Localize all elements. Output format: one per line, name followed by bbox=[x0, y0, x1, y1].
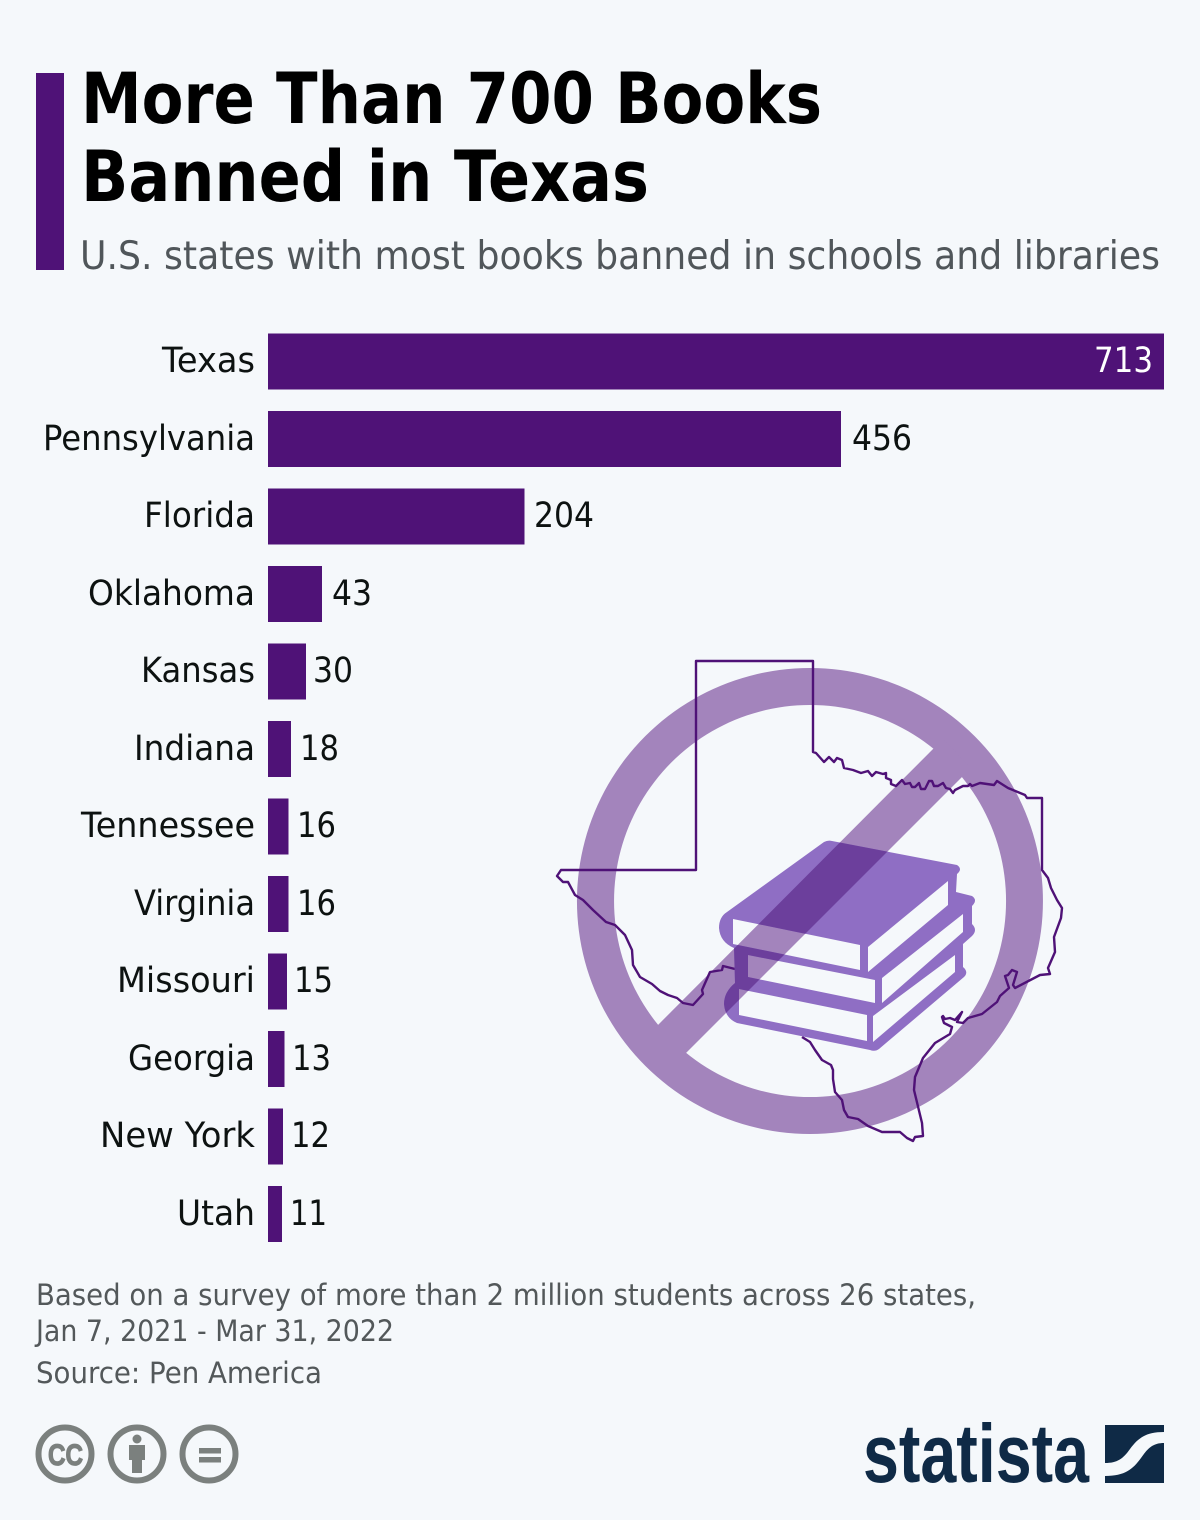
bar chart bbox=[43, 334, 1164, 1242]
row: Texas: Texas bbox=[161, 341, 255, 381]
icon: prohibition sign bbox=[577, 668, 1043, 1134]
row: Kansas: Kansas bbox=[141, 651, 255, 691]
row: Georgia: 13 bbox=[292, 1039, 331, 1079]
row: New York bbox=[100, 1108, 330, 1164]
row: Missouri: 15 bbox=[294, 961, 333, 1001]
row: New York: New York bbox=[100, 1116, 255, 1156]
icon: creative commons bbox=[38, 1428, 92, 1480]
row: Kansas bbox=[141, 644, 353, 700]
illustration: prohibition sign, Texas outline and books bbox=[557, 661, 1062, 1141]
title bbox=[81, 58, 822, 218]
title: Banned in Texas bbox=[81, 136, 649, 218]
row: Oklahoma: Oklahoma bbox=[88, 574, 255, 614]
row: Utah: 11 bbox=[290, 1194, 327, 1234]
row: Texas bbox=[161, 334, 1164, 390]
header accent bar bbox=[36, 73, 64, 270]
row: Florida: Florida bbox=[144, 496, 255, 536]
row: Georgia bbox=[128, 1031, 331, 1087]
row: Pennsylvania: 456 bbox=[852, 419, 912, 459]
row: Indiana: 18 bbox=[300, 729, 339, 769]
footnote and source: Based on a survey of more than 2 million students across 26 states, bbox=[36, 1278, 976, 1312]
Texas state outline bbox=[557, 661, 1062, 1141]
row: Missouri bbox=[117, 954, 333, 1010]
footnote and source bbox=[34, 1278, 976, 1390]
row: Oklahoma: 43 bbox=[332, 574, 372, 614]
icon: attribution bbox=[110, 1428, 164, 1480]
icon: creative commons: CC bbox=[48, 1439, 83, 1472]
row: Pennsylvania bbox=[43, 411, 912, 467]
footnote and source: Jan 7, 2021 - Mar 31, 2022 bbox=[34, 1314, 394, 1348]
row: Indiana bbox=[134, 721, 339, 777]
license icons bbox=[38, 1428, 236, 1480]
row: Utah: Utah bbox=[177, 1194, 255, 1234]
icon: no derivatives bbox=[182, 1428, 236, 1480]
row: Tennessee: 16 bbox=[297, 806, 336, 846]
row: Missouri: Missouri bbox=[117, 961, 255, 1001]
icon: stack of books bbox=[719, 841, 975, 1051]
row: Florida bbox=[144, 488, 594, 544]
footnote and source: Source: Pen America bbox=[36, 1356, 322, 1390]
row: Pennsylvania: Pennsylvania bbox=[43, 419, 255, 459]
row: Utah bbox=[177, 1186, 327, 1242]
row: Oklahoma bbox=[88, 566, 372, 622]
row: Kansas: 30 bbox=[313, 651, 353, 691]
row: Indiana: Indiana bbox=[134, 729, 255, 769]
row: Tennessee bbox=[80, 798, 336, 854]
row: Florida: 204 bbox=[534, 496, 594, 536]
row: Virginia: Virginia bbox=[134, 884, 255, 924]
logo: statista: statista bbox=[863, 1407, 1090, 1500]
row: Tennessee: Tennessee bbox=[80, 806, 255, 846]
row: Virginia bbox=[134, 876, 336, 932]
row: Georgia: Georgia bbox=[128, 1039, 255, 1079]
title: More Than 700 Books bbox=[81, 58, 822, 140]
row: New York: 12 bbox=[291, 1116, 330, 1156]
row: Virginia: 16 bbox=[297, 884, 336, 924]
row: Texas: 713 bbox=[1094, 341, 1153, 381]
